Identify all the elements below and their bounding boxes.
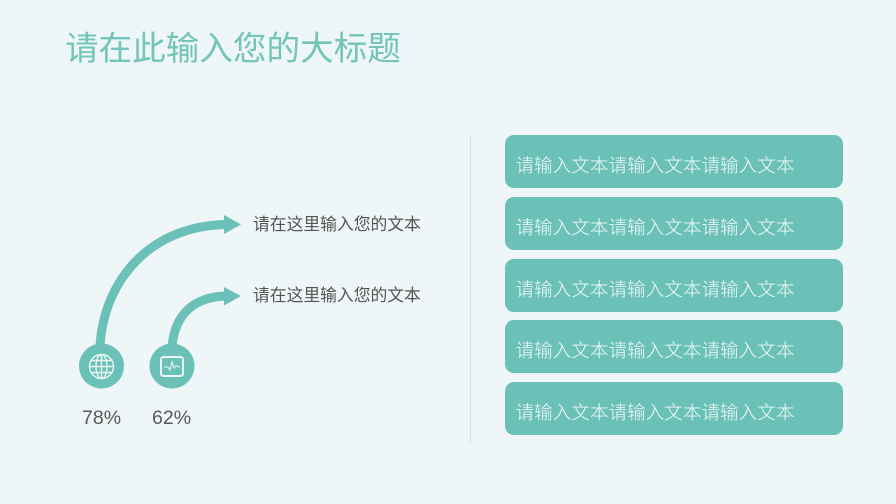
text box 1	[505, 135, 843, 188]
vertical divider	[470, 136, 471, 443]
percentage: 78%: 78%	[82, 407, 121, 429]
text box 5: 请输入文本请输入文本请输入文本	[516, 402, 794, 423]
label: first arrow: 请在这里输入您的文本	[253, 215, 421, 234]
text box 2: 请输入文本请输入文本请输入文本	[516, 217, 794, 238]
label: second arrow: 请在这里输入您的文本	[253, 286, 421, 305]
text box 3: 请输入文本请输入文本请输入文本	[516, 278, 794, 300]
text box 4	[505, 320, 843, 373]
arrow: long curve	[100, 215, 241, 346]
chart: arrows and icons	[79, 215, 241, 388]
panel: text list	[505, 135, 843, 435]
text box 3	[505, 258, 843, 312]
text box 1: 请输入文本请输入文本请输入文本	[516, 155, 794, 176]
text box 4: 请输入文本请输入文本请输入文本	[516, 340, 794, 361]
title: 请在此输入您的大标题	[65, 31, 401, 68]
arrow: short curve	[172, 287, 241, 346]
text box 5	[505, 382, 843, 435]
percentage: 62%: 62%	[152, 407, 191, 429]
icon: monitor	[150, 344, 194, 388]
text box 2	[505, 197, 843, 250]
icon: globe	[79, 344, 124, 388]
